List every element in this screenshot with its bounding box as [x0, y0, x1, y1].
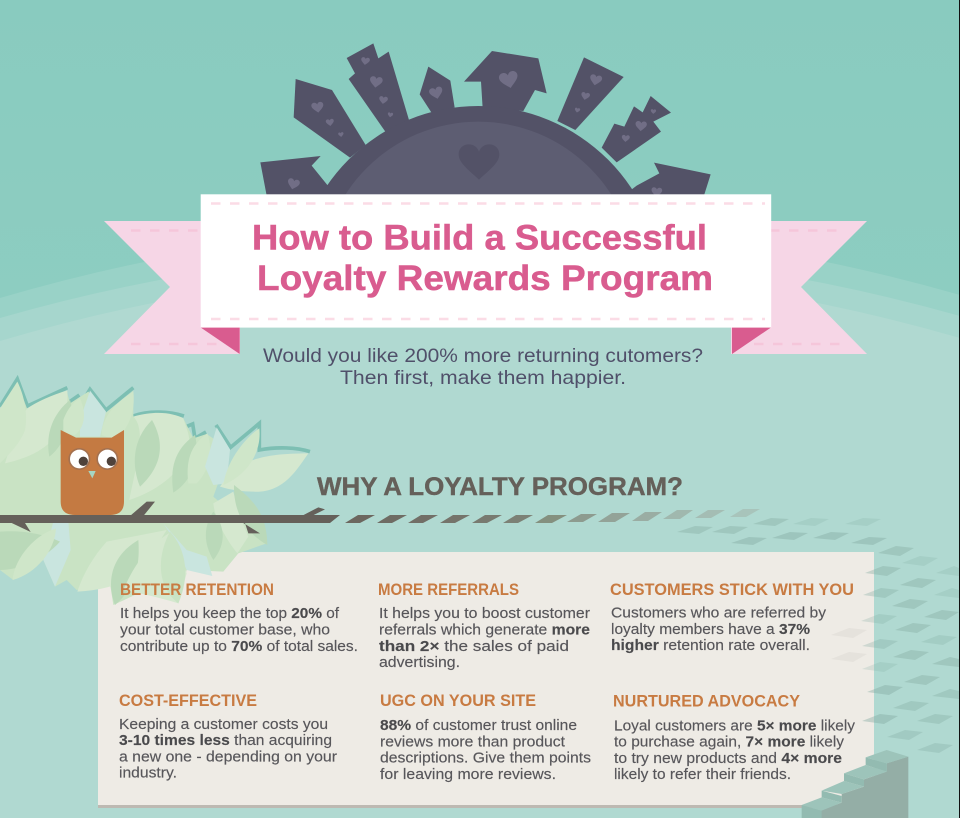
card: cost-effective: industry. [119, 766, 177, 782]
ribbon panel [201, 194, 771, 328]
owl [61, 430, 124, 515]
stair risers [802, 757, 887, 818]
title ribbon [104, 194, 867, 354]
card: nurtured advocacy: to try new products and 4× more [614, 751, 842, 767]
leaves [0, 382, 308, 605]
ribbon fold left [201, 328, 240, 354]
card: more referrals: MORE REFERRALS [378, 581, 519, 599]
card: more referrals: referrals which generate more [379, 622, 590, 638]
card: nurtured advocacy: likely to refer their friends. [614, 767, 791, 783]
card: customers stick with you: CUSTOMERS STICK WITH YOU [610, 581, 854, 599]
stair side [802, 757, 908, 818]
section heading: WHY A LOYALTY PROGRAM? [317, 473, 683, 501]
subtitle: Then first, make them happier. [340, 367, 626, 389]
card: customers stick with you: higher retention rate overall. [611, 638, 810, 654]
diamond pattern [677, 518, 959, 753]
card: ugc on your site: 88% of customer trust online [380, 718, 577, 734]
hill [328, 106, 632, 194]
subtitle [263, 345, 703, 389]
title text [252, 218, 713, 298]
card: ugc on your site: descriptions. Give them points [380, 750, 591, 766]
card: cost-effective: a new one - depending on your [119, 750, 337, 766]
card: more referrals: advertising. [379, 655, 460, 671]
info card [98, 552, 874, 808]
card: customers stick with you: loyalty members have a 37% [611, 622, 810, 638]
illustration: heart town on a hill [260, 43, 711, 194]
ribbon tail right [731, 221, 867, 354]
building hearts [286, 57, 662, 197]
buildings [260, 43, 711, 194]
foliage mass [0, 383, 267, 605]
card: better retention [120, 581, 358, 655]
card: ugc on your site: UGC ON YOUR SITE [380, 692, 536, 710]
card: better retention: It helps you keep the top 20% of [120, 606, 340, 622]
subtitle: Would you like 200% more returning cutomers? [263, 345, 703, 367]
branch dashes [345, 509, 760, 523]
tree foliage [0, 379, 340, 605]
title text: How to Build a Successful [252, 218, 707, 258]
card: ugc on your site: reviews more than product [380, 734, 565, 750]
card: ugc on your site: for leaving more reviews. [380, 767, 556, 783]
card: customers stick with you: Customers who are referred by [611, 606, 827, 622]
card: more referrals [378, 581, 590, 671]
card: better retention: BETTER RETENTION [120, 581, 274, 599]
staircase [802, 750, 908, 818]
card: customers stick with you [610, 581, 854, 654]
card: better retention: your total customer base, who [120, 622, 330, 638]
card: cost-effective: 3-10 times less than acquiring [119, 733, 332, 749]
card: cost-effective [119, 692, 337, 782]
card: nurtured advocacy: Loyal customers are 5× more likely [614, 718, 856, 734]
ribbon tail left [104, 221, 240, 354]
card: ugc on your site [380, 692, 591, 783]
foliage outline [0, 379, 310, 452]
ribbon fold right [732, 328, 771, 354]
title text: Loyalty Rewards Program [257, 259, 713, 298]
branch [0, 502, 340, 533]
card: nurtured advocacy [613, 692, 856, 783]
heart on hill [459, 144, 499, 180]
card: nurtured advocacy: NURTURED ADVOCACY [613, 692, 800, 710]
stair treads [802, 750, 908, 811]
card: more referrals: than 2× the sales of paid [379, 639, 569, 655]
card: cost-effective: COST-EFFECTIVE [119, 692, 257, 710]
card: nurtured advocacy: to purchase again, 7× more likely [614, 734, 845, 750]
card: cost-effective: Keeping a customer costs you [119, 717, 328, 733]
card: more referrals: It helps you to boost customer [379, 606, 590, 622]
card: better retention: contribute up to 70% of total sales. [120, 639, 358, 655]
